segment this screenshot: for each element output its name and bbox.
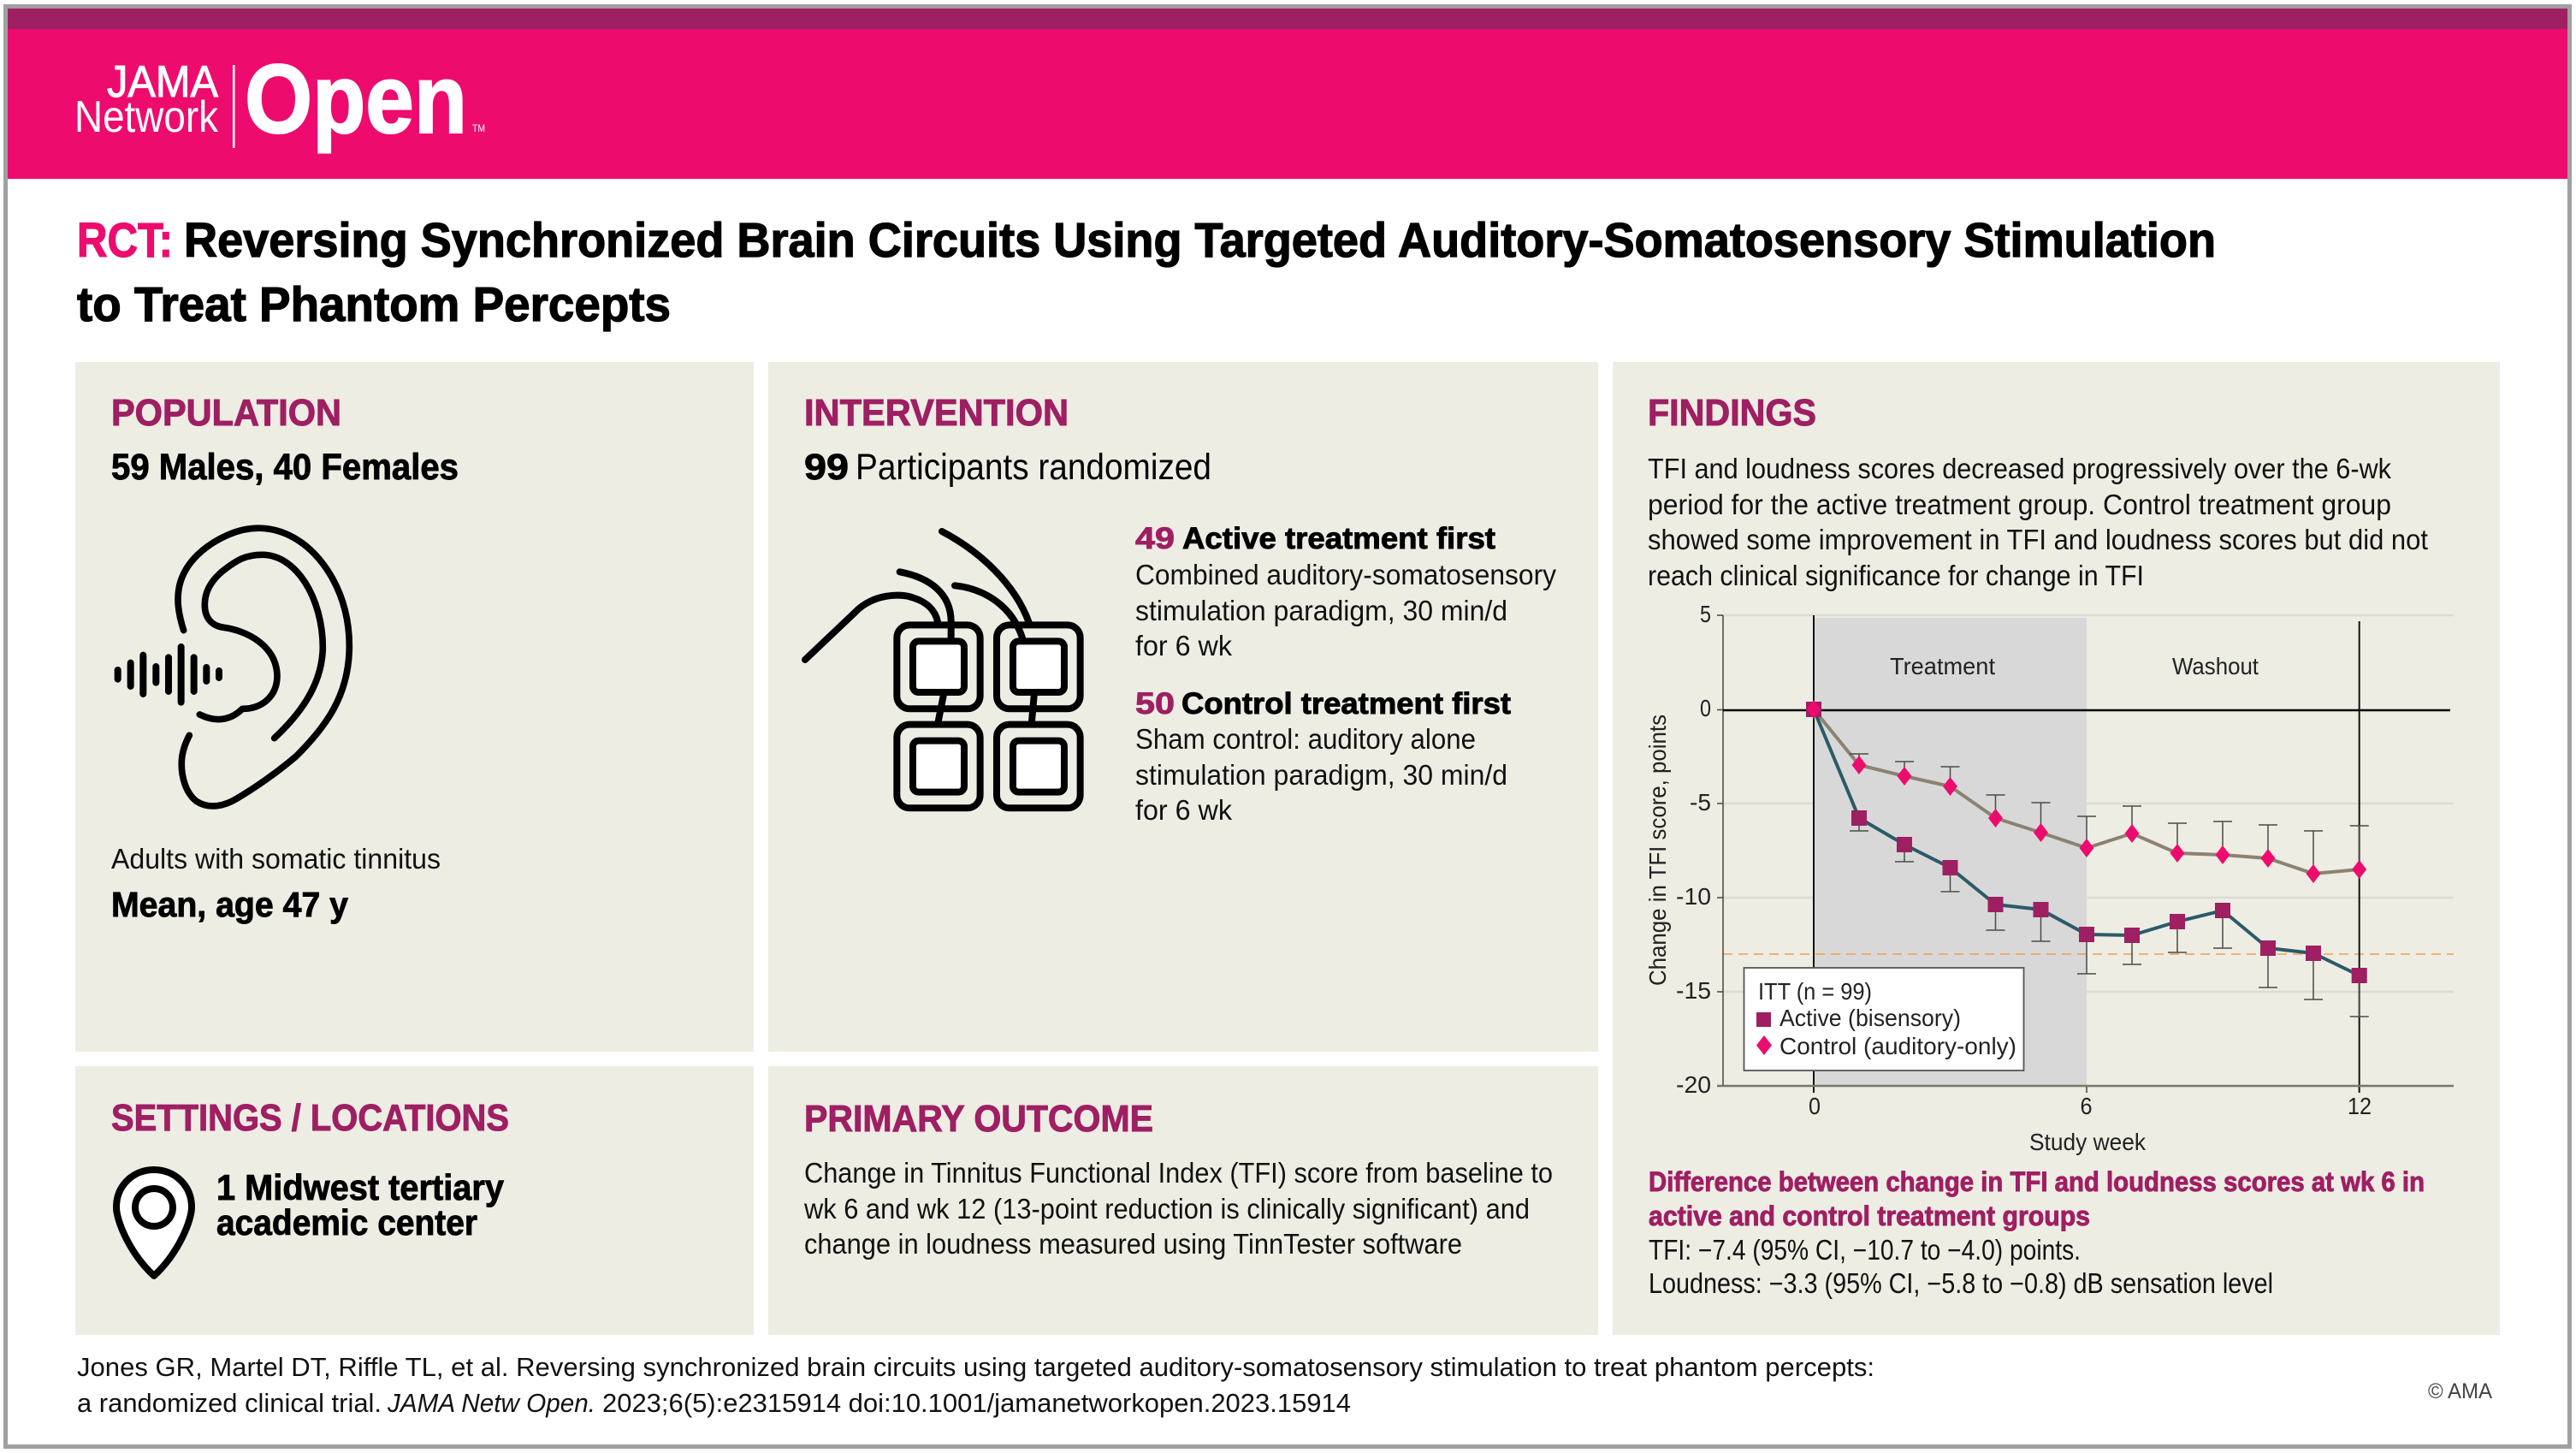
copyright: © AMA bbox=[2428, 1379, 2492, 1403]
active treatment group: 49 bbox=[1135, 522, 1175, 555]
active treatment group: Combined auditory-somatosensory bbox=[1135, 559, 1556, 590]
y axis labels: -5 bbox=[1690, 789, 1711, 815]
settings text: academic center bbox=[216, 1202, 477, 1242]
panel: population bbox=[75, 362, 754, 1052]
citation: a randomized clinical trial. bbox=[77, 1388, 382, 1418]
control treatment group: Control treatment first bbox=[1181, 687, 1511, 721]
active series markers bbox=[1806, 702, 2367, 983]
y axis title: Change in TFI score, points bbox=[1644, 715, 1671, 986]
primary outcome text: Change in Tinnitus Functional Index (TFI) score from baseline to bbox=[804, 1157, 1553, 1189]
panel: intervention bbox=[768, 362, 1598, 1052]
heading: primary outcome: PRIMARY OUTCOME bbox=[804, 1098, 1153, 1140]
primary outcome text: change in loudness measured using TinnTester software bbox=[804, 1228, 1462, 1260]
participants randomized: 99 bbox=[804, 447, 849, 488]
control treatment group: 50 bbox=[1135, 687, 1175, 721]
primary outcome text: wk 6 and wk 12 (13-point reduction is clinically significant) and bbox=[803, 1193, 1530, 1225]
logo: JAMA Network Open: Network bbox=[74, 92, 219, 142]
active treatment group: for 6 wk bbox=[1135, 630, 1232, 661]
label: washout period: Washout bbox=[2172, 653, 2259, 679]
logo: JAMA Network Open bbox=[74, 45, 485, 154]
active series line bbox=[1814, 709, 2360, 976]
citation bbox=[77, 1352, 1874, 1418]
y axis labels bbox=[1676, 601, 1711, 1098]
header banner bbox=[7, 9, 2569, 179]
key result values: Loudness: −3.3 (95% CI, −5.8 to −0.8) dB sensation level bbox=[1649, 1267, 2273, 1299]
active treatment group: stimulation paradigm, 30 min/d bbox=[1135, 595, 1507, 626]
x axis labels: 12 bbox=[2348, 1093, 2372, 1119]
citation: JAMA Netw Open. bbox=[387, 1388, 595, 1418]
settings text bbox=[216, 1167, 505, 1242]
control treatment group: for 6 wk bbox=[1135, 794, 1232, 826]
y axis labels: 0 bbox=[1700, 695, 1711, 721]
control treatment group: Sham control: auditory alone bbox=[1135, 723, 1476, 755]
key result values: TFI: −7.4 (95% CI, −10.7 to −4.0) points. bbox=[1649, 1234, 2081, 1266]
population counts: 59 Males, 40 Females bbox=[111, 447, 459, 488]
panel: primary outcome bbox=[768, 1066, 1598, 1335]
y axis labels: 5 bbox=[1700, 601, 1711, 627]
x axis labels: 0 bbox=[1809, 1093, 1821, 1119]
title: Reversing Synchronized Brain Circuits Using Targeted Auditory-Somatosensory Stimulation bbox=[184, 213, 2216, 268]
population description: Adults with somatic tinnitus bbox=[111, 843, 441, 875]
y axis labels: -10 bbox=[1676, 883, 1711, 910]
logo: JAMA Network Open: Open bbox=[245, 45, 467, 154]
icon: location pin bbox=[116, 1170, 192, 1276]
title bbox=[77, 213, 2216, 332]
heading: intervention: INTERVENTION bbox=[804, 392, 1069, 434]
key result heading: Difference between change in TFI and loudness scores at wk 6 in bbox=[1649, 1166, 2425, 1197]
title: RCT: bbox=[77, 213, 173, 268]
findings summary bbox=[1648, 453, 2428, 591]
primary outcome text bbox=[803, 1157, 1553, 1260]
settings text: 1 Midwest tertiary bbox=[216, 1167, 505, 1207]
chart legend: Active (bisensory) bbox=[1780, 1005, 1961, 1031]
y axis labels: -20 bbox=[1676, 1071, 1711, 1098]
shaded treatment period bbox=[1814, 618, 2087, 1086]
panel: settings and locations bbox=[75, 1066, 754, 1335]
heading: findings: FINDINGS bbox=[1648, 392, 1816, 434]
error bars bbox=[1850, 754, 2369, 1017]
x axis labels bbox=[1809, 1093, 2372, 1119]
title: to Treat Phantom Percepts bbox=[77, 277, 671, 332]
heading: settings: SETTINGS / LOCATIONS bbox=[111, 1097, 509, 1139]
findings summary: period for the active treatment group. Control treatment group bbox=[1648, 489, 2391, 520]
mean age: Mean, age 47 y bbox=[111, 885, 348, 924]
icon: ear with sound wave bbox=[118, 528, 349, 806]
citation: 2023;6(5):e2315914 doi:10.1001/jamanetworkopen.2023.15914 bbox=[602, 1388, 1351, 1418]
chart legend: ITT (n = 99) bbox=[1758, 978, 1872, 1005]
control series markers bbox=[1807, 700, 2366, 883]
control treatment group bbox=[1135, 687, 1511, 826]
key result values bbox=[1649, 1234, 2273, 1299]
key result heading: active and control treatment groups bbox=[1649, 1201, 2090, 1231]
logo: JAMA Network Open: TM bbox=[472, 122, 485, 134]
heading: population: POPULATION bbox=[111, 392, 341, 434]
control series line bbox=[1814, 709, 2360, 874]
citation: Jones GR, Martel DT, Riffle TL, et al. Reversing synchronized brain circuits using targeted auditory-somatosensory stimulation to treat phantom percepts: bbox=[77, 1352, 1874, 1382]
chart legend bbox=[1744, 968, 2024, 1070]
line chart: change in TFI score bbox=[1644, 601, 2454, 1155]
x axis title: Study week bbox=[2029, 1129, 2147, 1155]
chart legend: Control (auditory-only) bbox=[1780, 1033, 2016, 1059]
icon: electrodes bbox=[805, 531, 1081, 808]
participants randomized: Participants randomized bbox=[856, 447, 1211, 488]
y axis labels: -15 bbox=[1676, 977, 1711, 1004]
logo: JAMA Network Open: JAMA bbox=[107, 57, 218, 107]
label: treatment period: Treatment bbox=[1890, 653, 1995, 679]
key result heading bbox=[1649, 1166, 2425, 1231]
active treatment group: Active treatment first bbox=[1182, 522, 1495, 555]
findings summary: reach clinical significance for change in TFI bbox=[1648, 560, 2144, 591]
x axis labels: 6 bbox=[2081, 1093, 2093, 1119]
active treatment group bbox=[1135, 522, 1556, 661]
findings summary: TFI and loudness scores decreased progressively over the 6-wk bbox=[1648, 453, 2391, 484]
control treatment group: stimulation paradigm, 30 min/d bbox=[1135, 759, 1507, 791]
panel: findings bbox=[1613, 362, 2500, 1335]
findings summary: showed some improvement in TFI and loudness scores but did not bbox=[1648, 524, 2428, 555]
